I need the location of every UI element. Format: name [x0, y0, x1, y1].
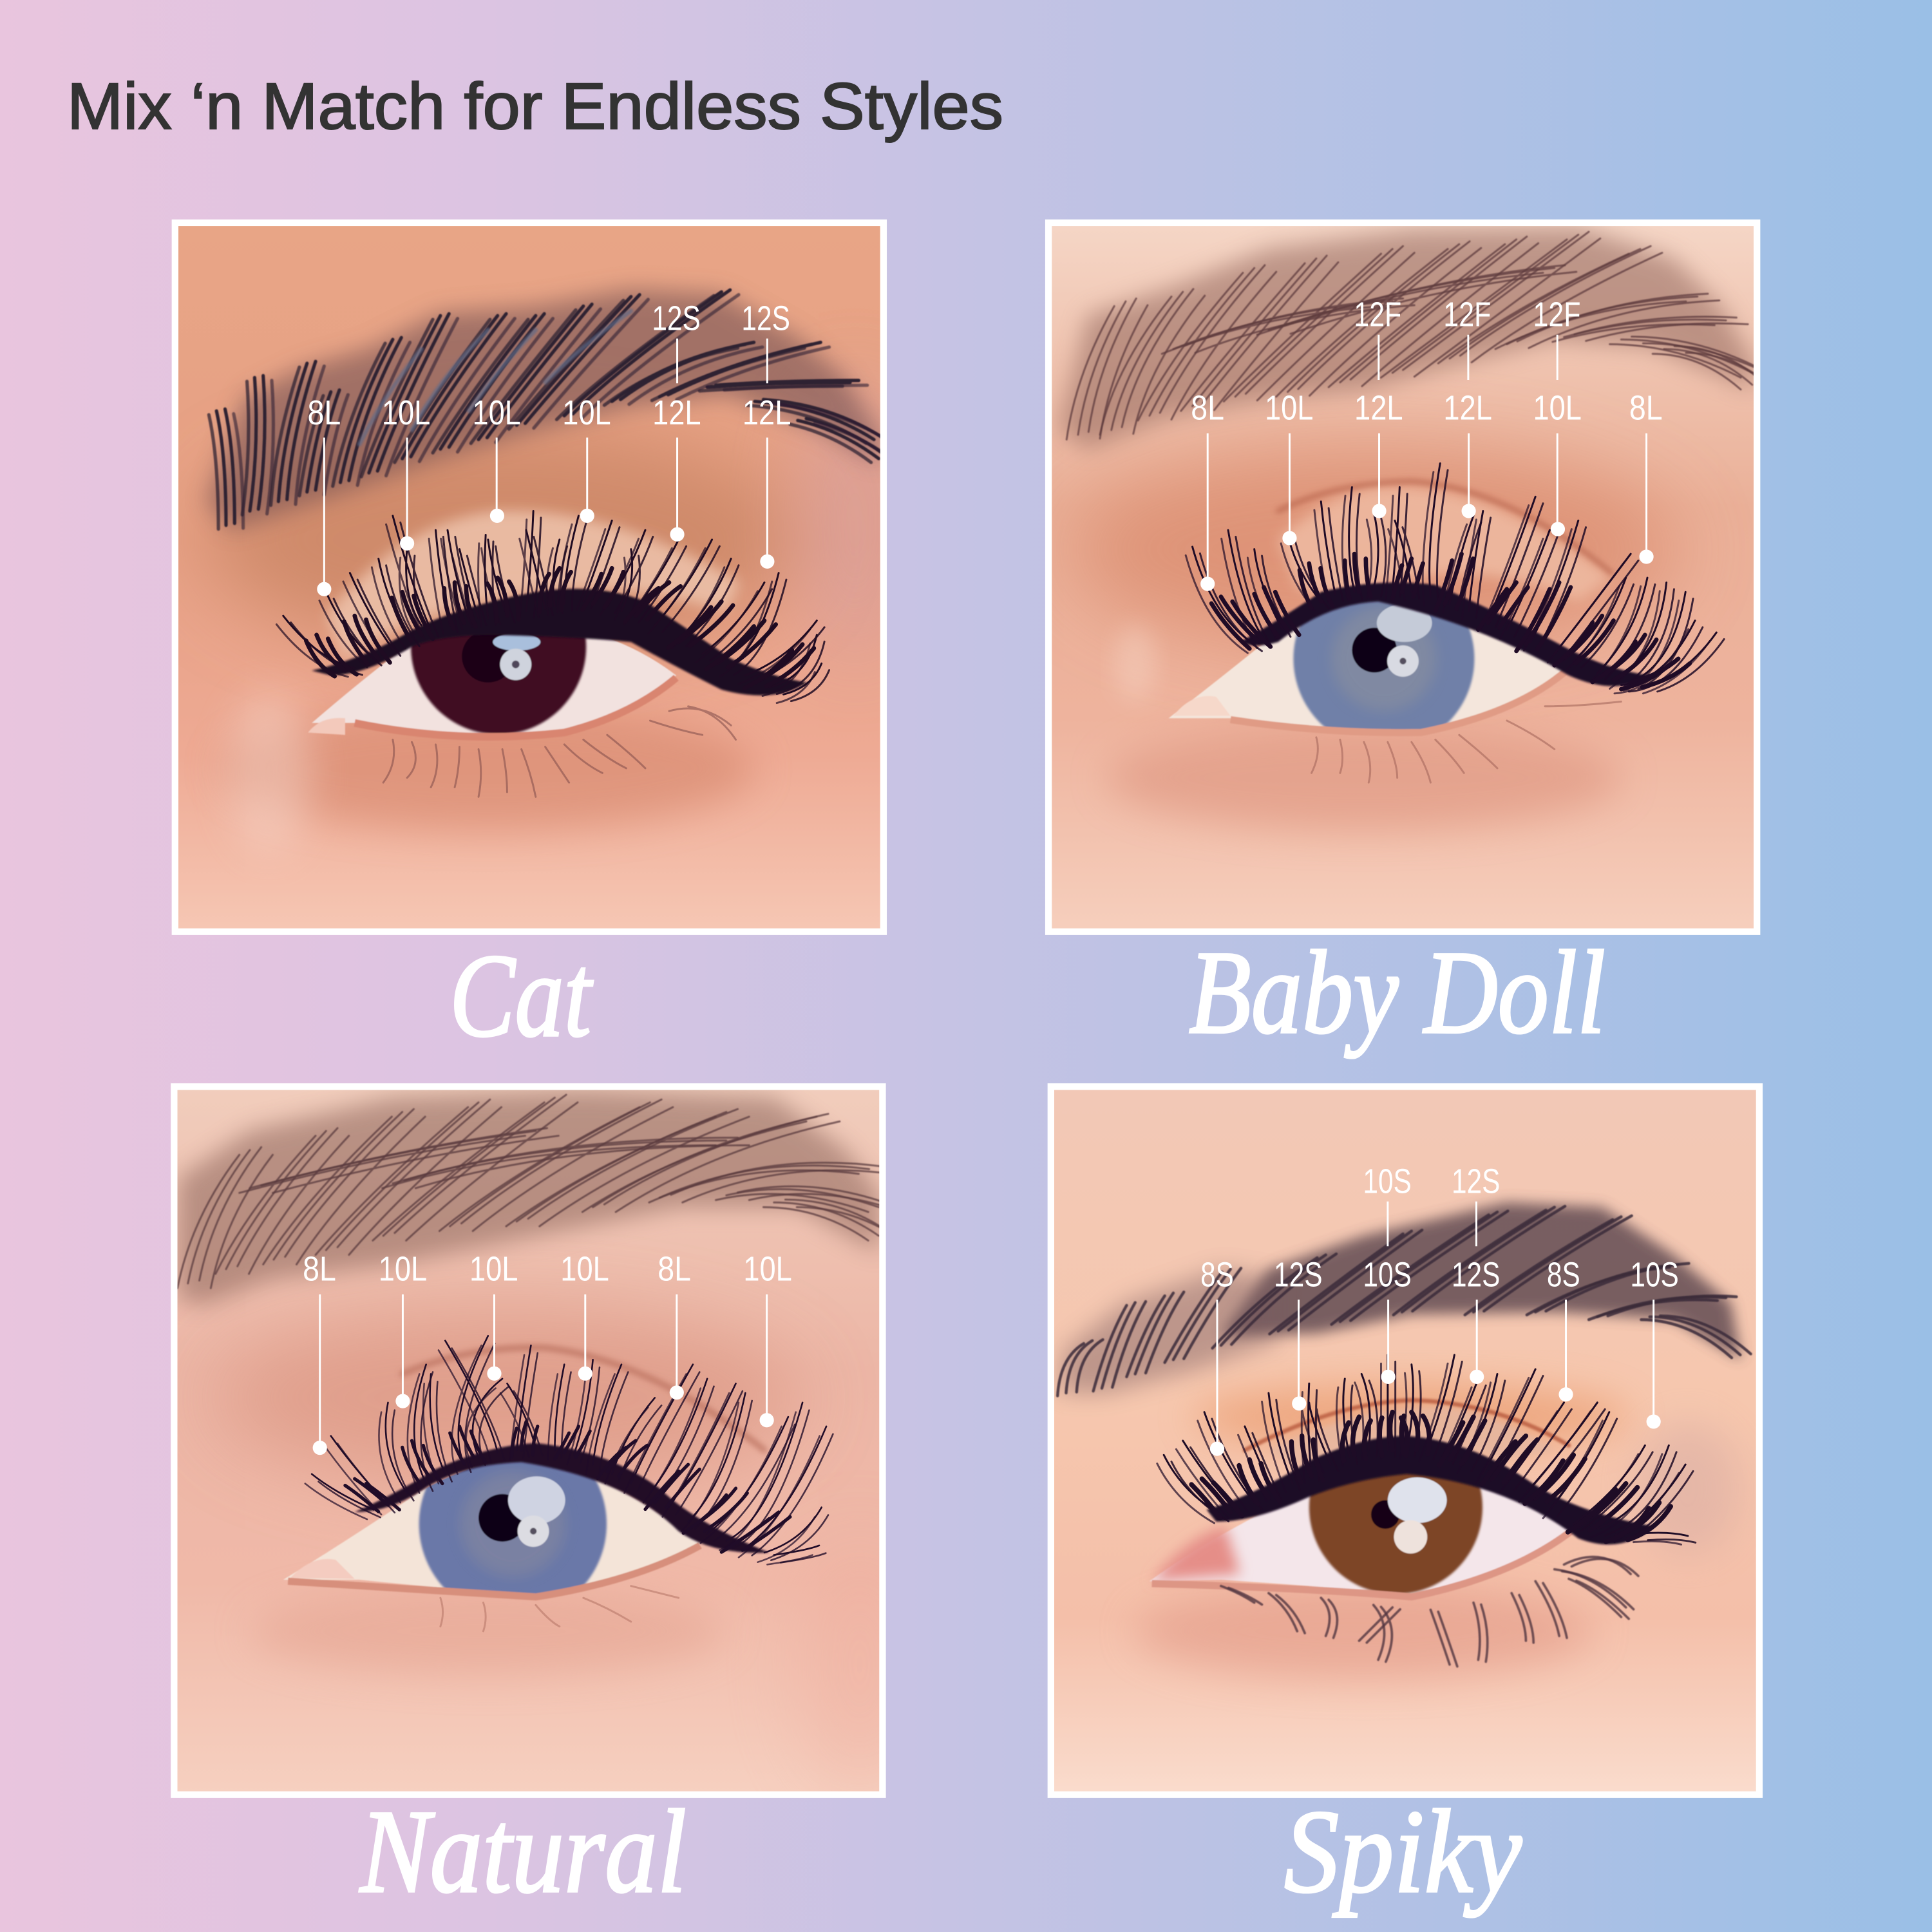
- callout: 12F / 12L: 12F: [1354, 295, 1401, 334]
- eyebrow: [1057, 1202, 1751, 1396]
- callout: 8L: 8L: [303, 1249, 336, 1288]
- photo frame: [1051, 1086, 1759, 1795]
- photo frame: [175, 223, 884, 932]
- callout: 8L: 8L: [1191, 388, 1224, 427]
- eyebrow: [207, 289, 896, 530]
- callout: 12S / 12L: 12L: [743, 393, 791, 432]
- callout: 10L: [472, 393, 521, 523]
- upper lashes: [1186, 463, 1724, 694]
- eye photo: Natural: [178, 1090, 922, 1788]
- title: Mix ‘n Match for Endless Styles: [67, 70, 1003, 143]
- panel: Baby Doll: [1045, 219, 1761, 935]
- eye photo: Baby Doll: [1059, 227, 1774, 830]
- eye photo: Spiky: [1057, 1202, 1751, 1679]
- callout: 10L: [1265, 388, 1313, 545]
- callout: 10L: 10L: [469, 1249, 518, 1288]
- lower lashes: [1221, 1557, 1638, 1667]
- callout: 10L: [469, 1249, 518, 1381]
- callout: 10L: 10L: [379, 1249, 427, 1288]
- callout: 8S: 8S: [1547, 1255, 1580, 1294]
- callout: 12S / 12S: 12S: [1452, 1162, 1500, 1200]
- callout: 10L: 10L: [382, 393, 430, 432]
- callout: 12S: 12S: [1274, 1255, 1322, 1294]
- callout: 12F / 12L: [1443, 295, 1492, 518]
- eye: brown iris: [308, 633, 679, 741]
- callout: 12F / 10L: 12F: [1533, 295, 1580, 334]
- callout: 8L: 8L: [658, 1249, 691, 1288]
- callout: 12S / 12L: 12L: [652, 393, 701, 432]
- upper lashes: [1157, 1355, 1696, 1544]
- callout: 8S: [1547, 1255, 1580, 1401]
- callout: 12S / 12L: [741, 299, 791, 569]
- callout: 10L: [560, 1249, 609, 1381]
- upper lashes: [276, 511, 829, 703]
- callout: 12F / 12L: 12F: [1443, 295, 1491, 334]
- lower lashes: [440, 1586, 679, 1631]
- photo frame: [1048, 223, 1757, 932]
- callout: 12S / 12L: 12S: [741, 299, 790, 337]
- callout: 10S / 10S: [1363, 1162, 1412, 1384]
- callout: 10S / 10S: 10S: [1363, 1255, 1412, 1294]
- callout: 10L: 10L: [472, 393, 521, 432]
- callout: 12S: [1274, 1255, 1322, 1410]
- callout: 10L: 10L: [743, 1249, 792, 1288]
- callout: 8L: [307, 393, 341, 596]
- callout: 12F / 10L: 10L: [1533, 388, 1582, 427]
- callout: 10L: 10L: [562, 393, 611, 432]
- callout: 10L: [379, 1249, 427, 1408]
- callout: 12F / 10L: [1533, 295, 1582, 536]
- callout: 8L: [1191, 388, 1224, 591]
- callout: 8L: [303, 1249, 336, 1455]
- callout: 10L: 10L: [1265, 388, 1313, 427]
- caption: Natural: Natural: [359, 1786, 687, 1918]
- callout: 12S / 12S: [1452, 1162, 1500, 1384]
- callout: 10L: 10L: [560, 1249, 609, 1288]
- callout: 8S: 8S: [1200, 1255, 1234, 1294]
- callout: 10S: 10S: [1630, 1255, 1679, 1294]
- eye: blue iris: [283, 1430, 700, 1618]
- photo frame: [174, 1086, 882, 1795]
- callout: 10S: [1630, 1255, 1679, 1429]
- callout: 8L: 8L: [307, 393, 341, 432]
- callout: 10S / 10S: 10S: [1363, 1162, 1412, 1200]
- panel: Cat: [171, 219, 887, 935]
- eyebrow: [178, 1090, 902, 1305]
- callout: 12F / 12L: [1354, 295, 1403, 518]
- callout: 8L: [658, 1249, 691, 1399]
- eye: blue iris: [1169, 568, 1566, 749]
- callout: 8S: [1200, 1255, 1234, 1456]
- callout: 10L: [382, 393, 430, 551]
- lower lashes: [1311, 701, 1621, 782]
- caption: Baby Doll: Baby Doll: [1189, 927, 1605, 1059]
- caption: Cat: Cat: [450, 930, 594, 1062]
- upper lashes: [305, 1336, 833, 1564]
- callout: 8L: [1629, 388, 1663, 564]
- panel: Spiky: [1047, 1083, 1763, 1798]
- panel: Natural: [171, 1083, 886, 1798]
- caption: Spiky: Spiky: [1284, 1786, 1522, 1918]
- eye photo: Cat: [207, 289, 912, 854]
- callout: 12S / 12L: [652, 299, 701, 542]
- callout: 8L: 8L: [1629, 388, 1663, 427]
- callout: 12S / 12S: 12S: [1452, 1255, 1500, 1294]
- eyebrow: [1059, 227, 1774, 449]
- callout: 10L: [743, 1249, 792, 1427]
- eye: brown iris: [1150, 1421, 1571, 1597]
- callout: 12S / 12L: 12S: [652, 299, 701, 337]
- callout: 10L: [562, 393, 611, 523]
- callout: 12F / 12L: 12L: [1354, 388, 1403, 427]
- lower lashes: [383, 706, 736, 797]
- callout: 12F / 12L: 12L: [1443, 388, 1492, 427]
